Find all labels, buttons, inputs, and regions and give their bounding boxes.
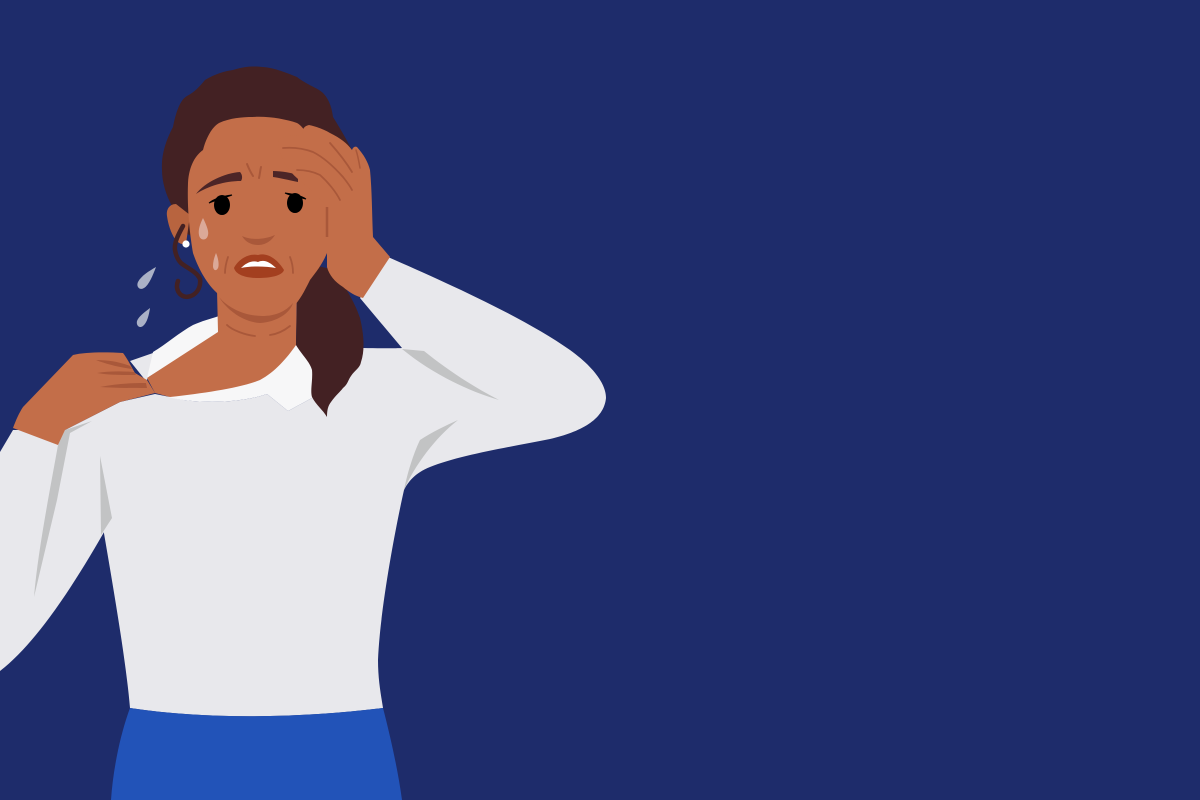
earring [182,240,190,248]
forehead wrinkles [247,164,261,178]
chin shadow [219,297,293,323]
hair: top of head [162,66,352,240]
eyes [209,193,306,215]
cheek wrinkles [225,257,293,273]
raised hand on forehead [278,125,390,298]
eyebrows [196,171,298,194]
ear [167,204,190,244]
stray curl of hair [175,226,200,297]
flying sweat drops [137,267,156,327]
shirt: torso and raised sleeve [58,257,606,716]
hair: back ponytail [296,262,364,417]
face [188,117,329,318]
mouth [234,254,284,278]
small collar flap by hand [130,353,165,381]
skin: neck and chest [147,285,297,397]
nose [242,235,275,245]
collar [147,316,312,411]
shirt fold shadows [34,349,499,597]
skirt [111,708,402,800]
neck creases [227,325,290,336]
teardrops on face [199,218,219,270]
left arm sleeve [0,430,120,671]
hand gripping collar [13,352,155,445]
